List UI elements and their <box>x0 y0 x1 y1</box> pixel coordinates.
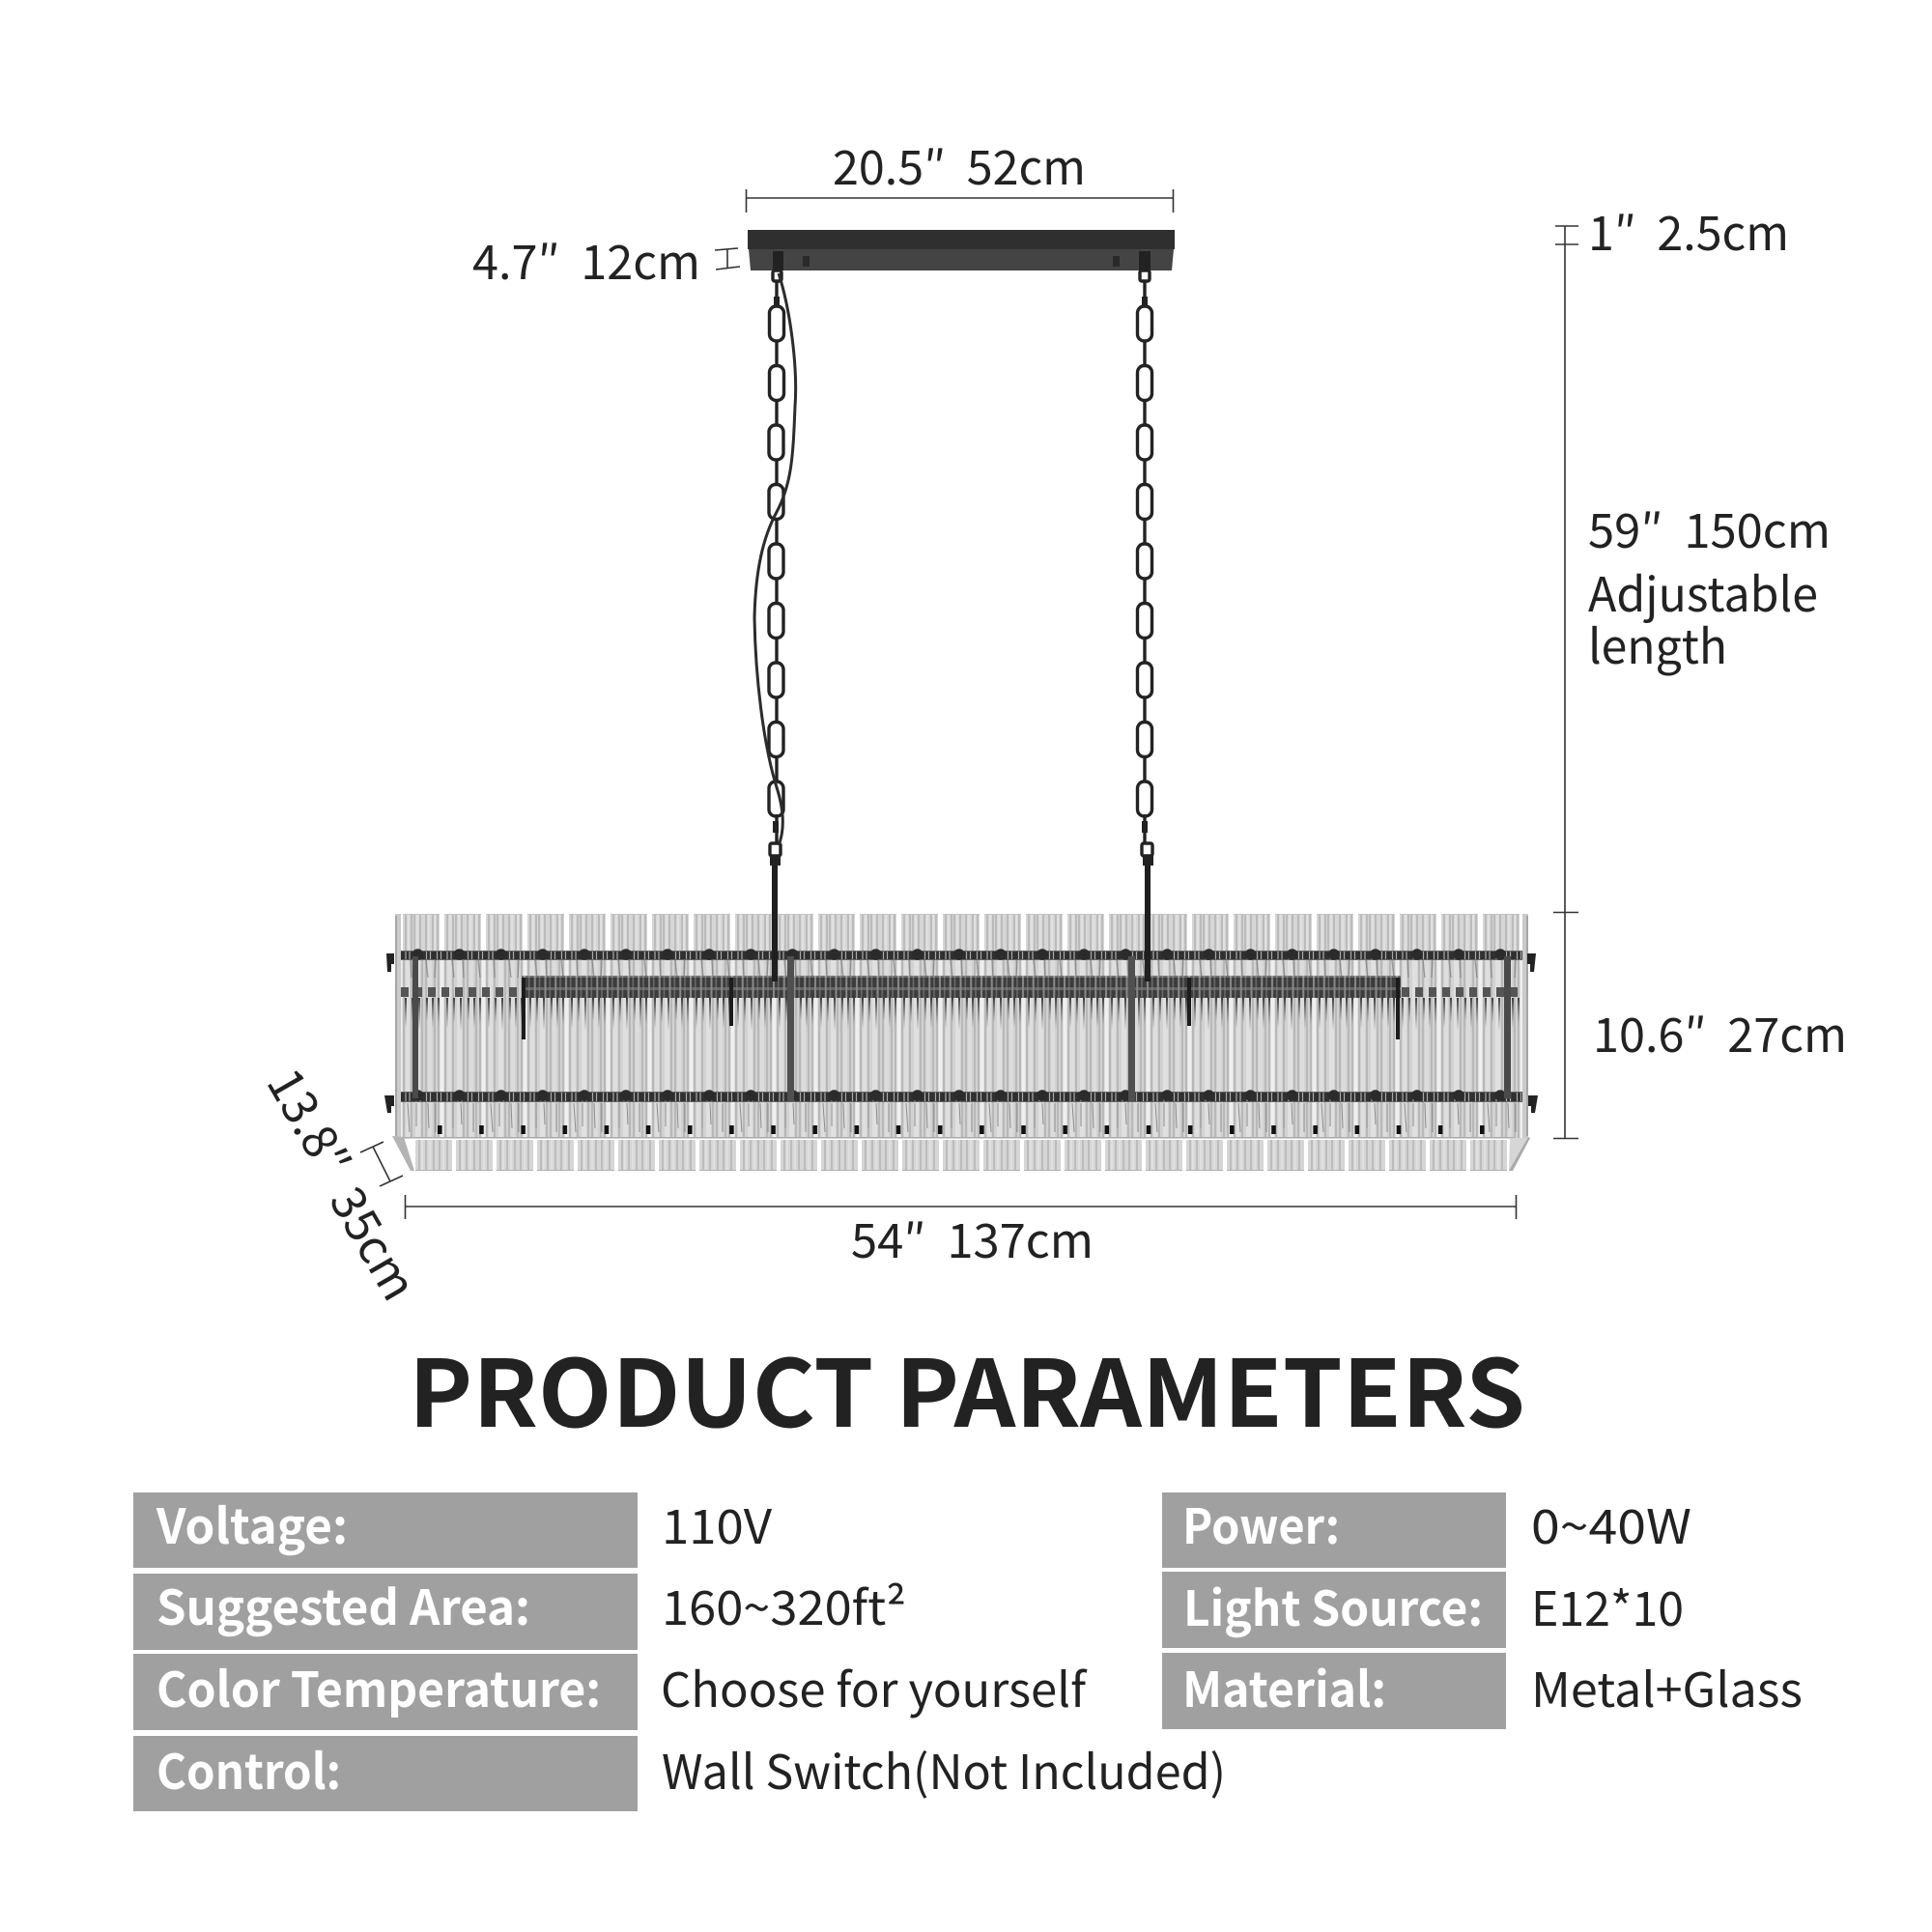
right chain <box>1138 270 1152 856</box>
row: light source: Light Source: <box>1183 1571 1483 1640</box>
row: suggested area: Suggested Area: <box>156 1570 530 1639</box>
row: color temperature: Choose for yourself <box>661 1653 1088 1721</box>
dimension lines <box>360 189 1578 1219</box>
label: canopy depth: 4.7″ 12cm <box>472 225 700 294</box>
chandelier body <box>384 855 1538 1171</box>
row: power <box>1162 1489 1691 1568</box>
label: body height: 10.6″ 27cm <box>1593 998 1847 1066</box>
label: chain length: Adjustable <box>1588 557 1818 626</box>
row: material: Metal+Glass <box>1531 1653 1803 1721</box>
row: control: Control: <box>156 1734 341 1804</box>
row: color temperature: Color Temperature: <box>156 1652 601 1721</box>
row: voltage <box>133 1489 773 1568</box>
label: body depth inches: 13.8″ <box>253 1055 369 1188</box>
parameter table <box>133 1489 1803 1811</box>
label: chain length <box>1588 494 1831 678</box>
title: PRODUCT PARAMETERS <box>409 1320 1525 1454</box>
row: power: 0~40W <box>1531 1490 1691 1558</box>
canopy <box>748 230 1175 270</box>
label: canopy width: 20.5″ 52cm <box>833 130 1086 199</box>
label: body length: 54″ 137cm <box>851 1204 1094 1272</box>
power cord <box>754 273 796 845</box>
row: control <box>133 1734 1226 1811</box>
label: chain length: 59″ 150cm <box>1588 494 1831 562</box>
row: power: Power: <box>1182 1489 1340 1558</box>
label: body depth centimetres: 35cm <box>316 1173 436 1312</box>
row: color temperature <box>133 1652 1088 1730</box>
row: light source: E12*10 <box>1531 1572 1684 1640</box>
row: material: Material: <box>1182 1652 1386 1721</box>
row: voltage: 110V <box>662 1490 773 1558</box>
row: light source <box>1162 1571 1684 1648</box>
row: suggested area: 160~320ft² <box>662 1571 906 1639</box>
left chain <box>769 270 784 856</box>
label: canopy height: 1″ 2.5cm <box>1588 196 1789 265</box>
row: material <box>1162 1652 1803 1729</box>
row: control: Wall Switch(Not Included) <box>662 1735 1226 1804</box>
label: chain length: length <box>1588 610 1727 678</box>
row: suggested area <box>133 1570 906 1650</box>
row: voltage: Voltage: <box>156 1489 348 1558</box>
